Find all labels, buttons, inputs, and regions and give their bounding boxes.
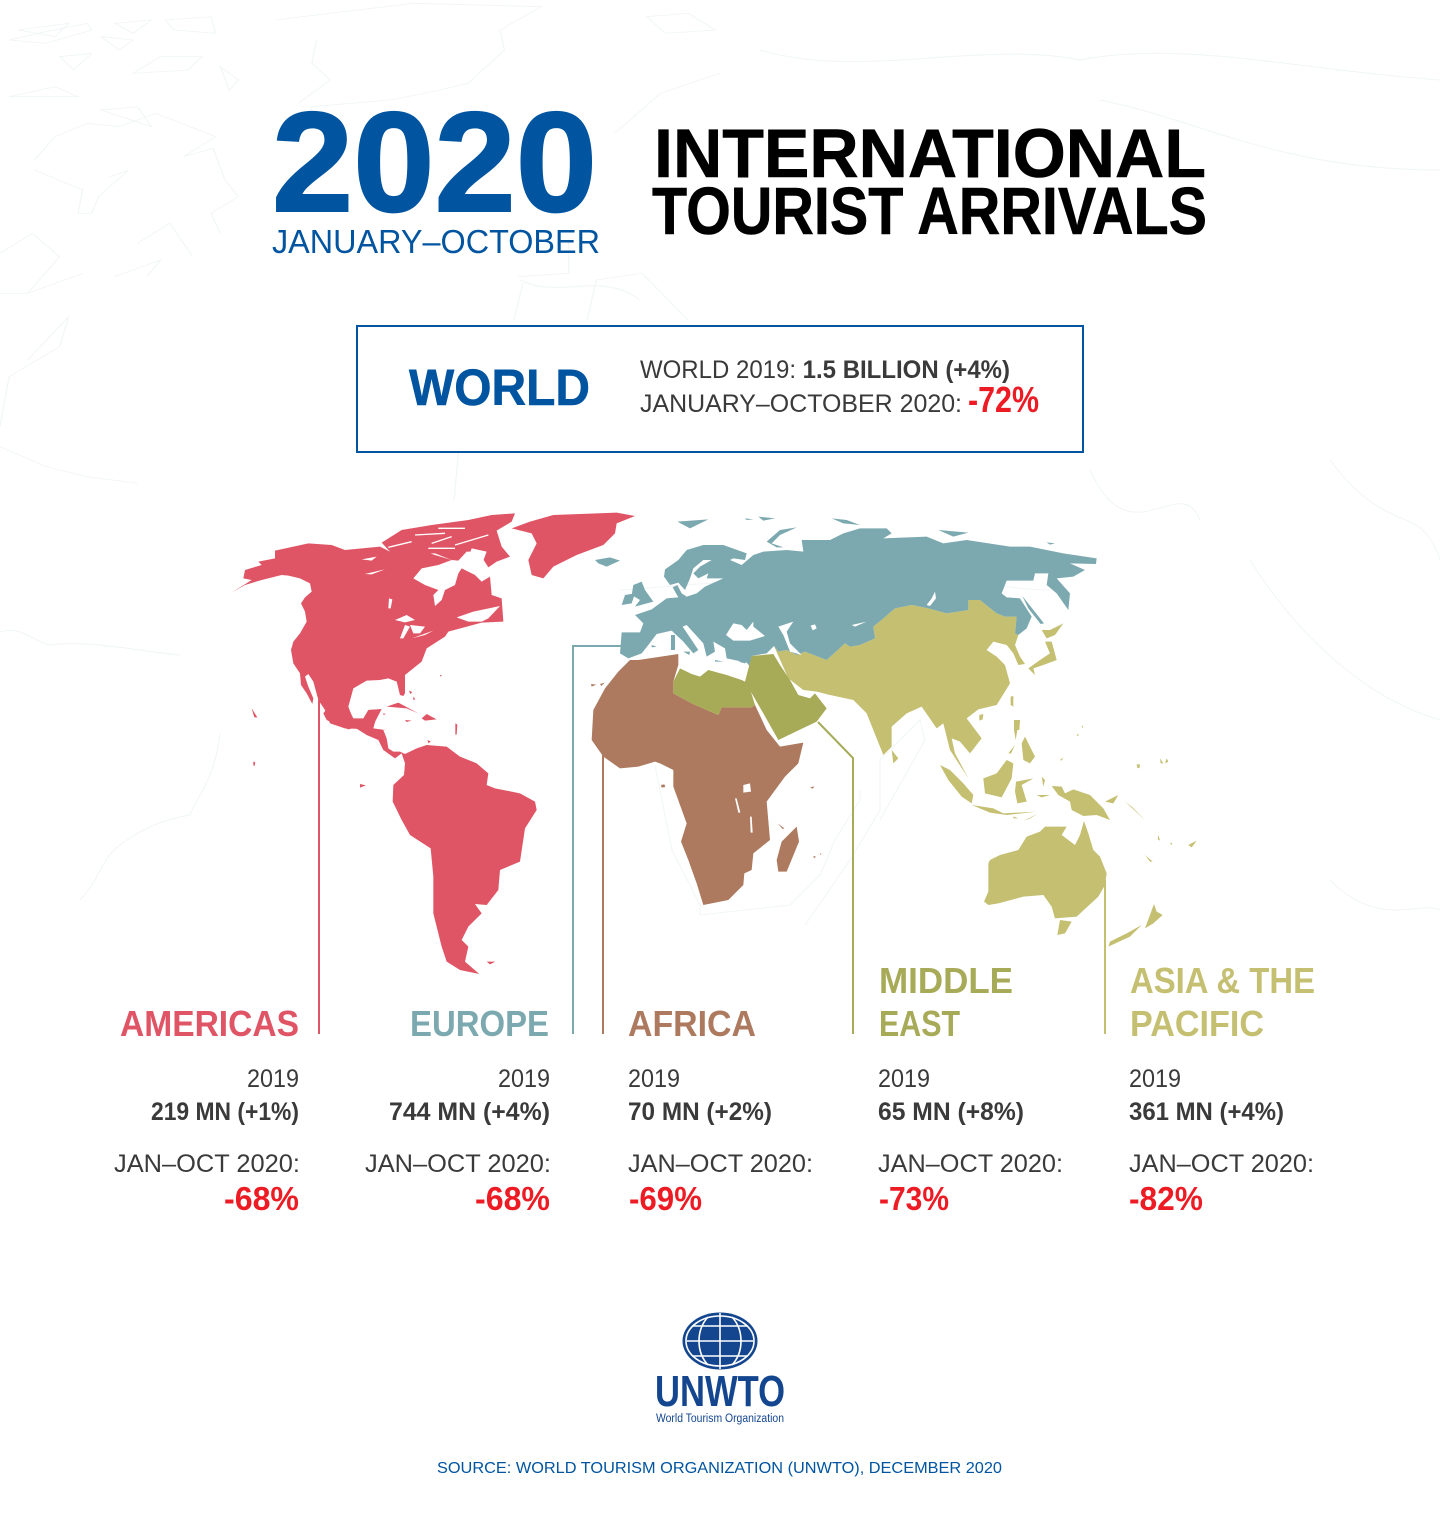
panel: Asia and the Pacific: 361 MN (+4%) bbox=[1129, 1098, 1284, 1126]
panel: Europe: EUROPE bbox=[410, 1003, 549, 1044]
source: SOURCE: WORLD TOURISM ORGANIZATION (UNWTO), DECEMBER 2020 bbox=[437, 1460, 1002, 1477]
region: Middle East bbox=[673, 654, 827, 740]
heading: International Tourist Arrivals: INTERNATIONAL bbox=[654, 115, 1206, 192]
panel: Middle East: -73% bbox=[879, 1180, 949, 1217]
panel: Africa: AFRICA bbox=[628, 1003, 756, 1044]
panel: Americas: 2019 bbox=[247, 1065, 299, 1093]
heading: International Tourist Arrivals bbox=[652, 115, 1207, 249]
region: Europe bbox=[595, 517, 1097, 667]
world map bbox=[232, 513, 1197, 974]
panel: Americas: 219 MN (+1%) bbox=[151, 1098, 299, 1126]
panel: Americas: -68% bbox=[224, 1180, 299, 1217]
panel: Africa: 2019 bbox=[628, 1065, 680, 1093]
panel: Americas bbox=[114, 1003, 300, 1217]
panel: Asia and the Pacific: ASIA & THE bbox=[1130, 960, 1315, 1001]
logo: UNWTO: UNWTO bbox=[655, 1367, 785, 1416]
panel: Middle East: EAST bbox=[879, 1003, 960, 1044]
panel: Americas: AMERICAS bbox=[120, 1003, 299, 1044]
title: 2020: 2020 bbox=[272, 83, 597, 242]
panel: Europe bbox=[365, 1003, 551, 1217]
connector: Asia and the Pacific bbox=[1104, 880, 1106, 1034]
panel: Asia and the Pacific bbox=[1129, 960, 1315, 1217]
panel: Middle East: 65 MN (+8%) bbox=[878, 1098, 1024, 1126]
panel: Europe: -68% bbox=[475, 1180, 550, 1217]
connector: Europe bbox=[573, 646, 621, 1034]
world label: WORLD bbox=[409, 359, 590, 416]
subtitle: January–October: JANUARY–OCTOBER bbox=[272, 223, 600, 260]
panel: Asia and the Pacific: PACIFIC bbox=[1130, 1003, 1264, 1044]
panel: Africa: JAN–OCT 2020: bbox=[628, 1150, 813, 1178]
connector: Americas bbox=[318, 700, 320, 1034]
world 2019 figure: WORLD 2019: 1.5 BILLION (+4%) bbox=[640, 356, 1010, 384]
world 2020 change: -72% bbox=[968, 379, 1039, 420]
region: Africa bbox=[591, 654, 822, 905]
panel: Africa bbox=[628, 1003, 813, 1217]
heading: International Tourist Arrivals: TOURIST ARRIVALS bbox=[652, 174, 1207, 249]
region: Asia and the Pacific bbox=[774, 600, 1197, 947]
panel: Asia and the Pacific: -82% bbox=[1129, 1180, 1203, 1217]
panel: Middle East: JAN–OCT 2020: bbox=[878, 1150, 1063, 1178]
panel: Americas: JAN–OCT 2020: bbox=[114, 1150, 300, 1178]
world 2020 label: JANUARY–OCTOBER 2020: bbox=[640, 390, 962, 418]
panel: Africa: -69% bbox=[629, 1180, 702, 1217]
logo: UNWTO bbox=[655, 1312, 785, 1425]
icon: globe bbox=[682, 1312, 758, 1370]
connector: Africa bbox=[602, 750, 604, 1034]
connector: Middle East bbox=[818, 722, 853, 1034]
panel: world summary bbox=[357, 326, 1083, 452]
panel: Asia and the Pacific: JAN–OCT 2020: bbox=[1129, 1150, 1314, 1178]
panel: Europe: JAN–OCT 2020: bbox=[365, 1150, 551, 1178]
panel: Middle East bbox=[878, 960, 1063, 1217]
panel: Middle East: 2019 bbox=[878, 1065, 930, 1093]
panel: Middle East: MIDDLE bbox=[879, 960, 1013, 1001]
panel: Europe: 744 MN (+4%) bbox=[389, 1098, 550, 1126]
panel: Asia and the Pacific: 2019 bbox=[1129, 1065, 1181, 1093]
logo: UNWTO: World Tourism Organization bbox=[656, 1413, 784, 1425]
region: Americas bbox=[232, 513, 635, 974]
panel: Africa: 70 MN (+2%) bbox=[628, 1098, 772, 1126]
panel: Europe: 2019 bbox=[498, 1065, 550, 1093]
